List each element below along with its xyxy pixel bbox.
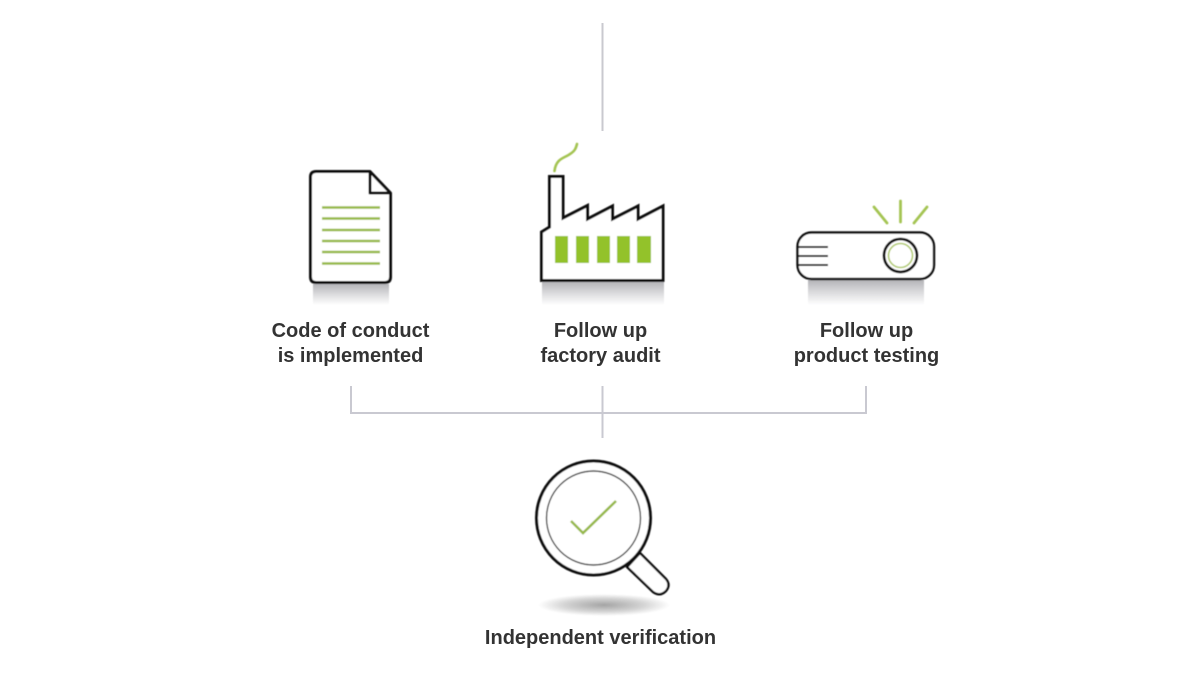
- label: product testing: product testing: [794, 345, 939, 367]
- label: product testing: Follow up: [820, 320, 913, 342]
- top connector line: [602, 23, 604, 131]
- label: factory audit: Follow up: [554, 320, 647, 342]
- label: independent verification: Independent verification: [485, 627, 716, 649]
- icon: factory: [542, 144, 664, 305]
- icon: projector: [798, 201, 934, 305]
- icon: magnifying glass: [536, 461, 670, 616]
- icon: document: [310, 172, 390, 305]
- label: code of conduct: Code of conduct: [272, 320, 429, 342]
- label: factory audit: factory audit: [540, 345, 661, 367]
- label: code of conduct: is implemented: [278, 345, 423, 367]
- bracket connector: [351, 386, 866, 438]
